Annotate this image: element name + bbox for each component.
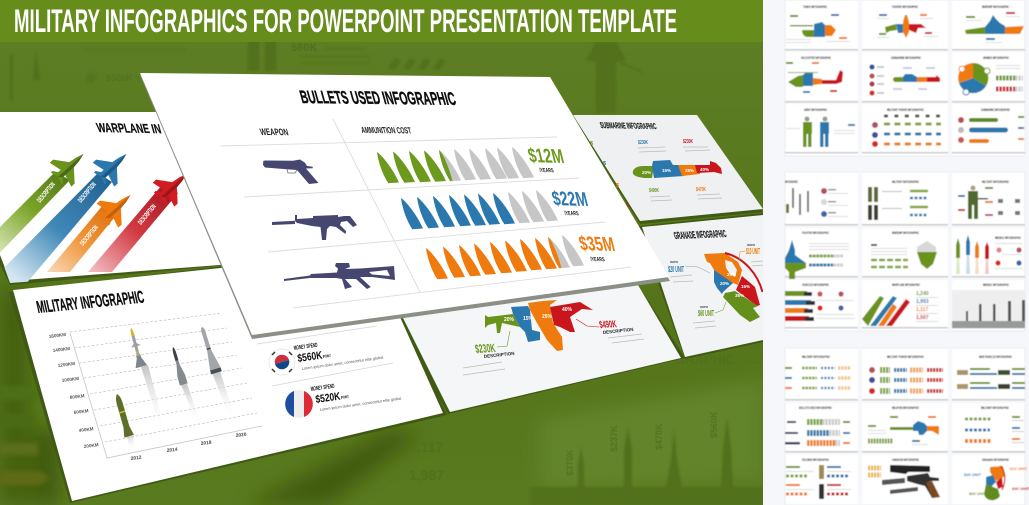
money spend: South Korea: MONEY SPEND xyxy=(293,343,318,352)
column heading: ammunition cost: AMMUNITION COST xyxy=(360,125,413,135)
callout: $230K xyxy=(474,331,515,359)
submarine slide labels: $470K xyxy=(696,187,706,193)
plane percent labels: 25% xyxy=(542,314,553,320)
thumbnail: warplane ribbons: 1,993 xyxy=(916,299,929,305)
thumbnail: warship xyxy=(965,4,1024,43)
thumbnail: helicopter xyxy=(786,55,843,93)
panel: grenade slide: DESCRIPTION xyxy=(747,243,755,247)
money spend: South Korea: /POINT xyxy=(322,353,331,359)
value: $12M xyxy=(526,145,566,174)
icon: assault rifle xyxy=(284,263,395,289)
missile 3 xyxy=(169,346,188,386)
y-axis labels: 1400KM xyxy=(53,346,71,353)
thumbnail: grenade xyxy=(964,457,1029,500)
y-axis labels: 200KM xyxy=(84,442,99,449)
thumbnail: bullets used xyxy=(785,405,850,444)
background: blurred green backdrop: 560K xyxy=(291,42,317,54)
plane percent labels xyxy=(504,307,573,323)
warplane slide heading: WARPLANE IN xyxy=(95,120,163,136)
money spend: France: Lorem ipsum dolor amet, consectetur elite global. xyxy=(319,395,402,412)
icon: submachine gun xyxy=(272,215,357,240)
icon: pistol xyxy=(263,160,318,184)
ribbon labels: DESCRIPTION xyxy=(137,203,158,226)
callout: $490K xyxy=(576,319,634,335)
thumbnail: military bullets xyxy=(965,405,1024,443)
bullets row: green xyxy=(377,147,534,183)
ribbon labels: DESCRIPTION xyxy=(36,181,57,204)
submarine slide labels: $ xyxy=(616,183,619,189)
background: blurred green backdrop xyxy=(0,0,763,505)
ribbon labels: DESCRIPTION xyxy=(79,224,100,247)
grenade diagram: 35% xyxy=(735,293,744,298)
callout: $490K: $490K xyxy=(598,319,618,331)
y-axis labels: 400KM xyxy=(79,426,94,433)
background: blurred green backdrop: $470K xyxy=(654,423,664,450)
missile smoke trails xyxy=(127,365,235,450)
value: $35M xyxy=(577,233,617,263)
thumbnail: warplane ribbons: 1,117 xyxy=(916,307,928,313)
panel: grenade slide: DESCRIPTION xyxy=(700,305,708,309)
plane diagram split into four colours xyxy=(485,300,593,351)
ribbon labels: DESCRIPTION xyxy=(77,181,98,204)
thumbnail: missile chart small xyxy=(785,179,848,217)
title banner xyxy=(0,0,763,42)
thumbnail: war vehicles xyxy=(957,354,1025,389)
money spend: South Korea: $560K xyxy=(297,350,323,365)
thumbnail: tanks xyxy=(786,4,850,43)
thumbnail group 3 backing xyxy=(785,348,1025,505)
y-axis labels: 600KM xyxy=(74,408,89,415)
plane percent labels: 20% xyxy=(504,317,515,323)
thumbnail: fighter jet xyxy=(785,230,849,279)
panel: main bullets used slide xyxy=(140,73,670,339)
thumbnail: army soldiers xyxy=(786,107,855,147)
missile chart xyxy=(49,313,262,462)
thumbnail: missile row xyxy=(956,235,1023,274)
missile 2 xyxy=(125,326,147,368)
thumbnail: fighter: FIGHTER INFOGRAPHIC xyxy=(892,4,918,9)
background: blurred green backdrop: 1,987 xyxy=(409,467,444,483)
value: $12M: $12M xyxy=(526,145,566,168)
grenade diagram: 20% xyxy=(720,281,729,286)
thumbnail group 1 backing xyxy=(785,0,1025,156)
y-axis labels: 1600KM xyxy=(49,332,67,339)
panel: submarine slide xyxy=(572,115,763,224)
thumbnail: military comparison: MILITARY INFOGRAPHIC xyxy=(802,354,830,359)
thumbnail: grenade: $60 UNIT xyxy=(969,491,987,496)
callout: $230K: DESCRIPTION xyxy=(484,351,515,359)
thumbnail: submarine fleets xyxy=(958,107,1024,143)
thumbnail: handgun xyxy=(868,457,940,498)
thumbnail: military soldiers: MILITARY INFOGRAPHIC xyxy=(892,179,919,184)
thumbnail: grenade: $40 UNIT xyxy=(1012,486,1029,491)
y-axis labels: 800KM xyxy=(70,393,85,400)
value: $12M: /YEARS xyxy=(539,167,554,174)
y-axis labels: 1200KM xyxy=(58,361,76,368)
thumbnail: warplane ribbons: WARPLANE INFOGRAPHIC xyxy=(892,282,920,287)
x-axis labels: 2020 xyxy=(236,432,247,439)
missile 1 xyxy=(112,393,134,438)
column heading: weapon: WEAPON xyxy=(259,127,290,138)
military slide heading: MILITARY INFOGRAPHIC xyxy=(35,287,146,317)
thumbnail: vehicles xyxy=(785,282,854,321)
x-axis labels: 2018 xyxy=(201,440,212,447)
thumbnail: warplane ribbons xyxy=(862,282,938,326)
value: $22M xyxy=(550,188,590,217)
thumbnail: fighter xyxy=(877,4,938,38)
submarine slide heading: SUBMARINE INFOGRAPHIC xyxy=(599,120,658,131)
money spend: France: MONEY SPEND xyxy=(310,384,335,393)
grenade slide labels: $60 UNIT xyxy=(698,309,714,318)
thumbnail: military power troops xyxy=(869,354,943,394)
thumbnail: military power troops: MILITARY POWER INFOGRAPHIC xyxy=(887,354,924,359)
x-axis labels: 2012 xyxy=(131,455,142,462)
thumbnail: fighter jet: FIGHTER INFOGRAPHIC xyxy=(802,230,829,235)
submarine slide labels: $230K xyxy=(638,140,648,146)
blurred vehicles on left xyxy=(0,386,50,485)
money spend: France: /POINT xyxy=(340,394,349,400)
panel: military slide xyxy=(9,266,447,503)
grenade slide labels: $20 UNIT xyxy=(668,265,684,274)
thumbnail: military comparison xyxy=(785,354,851,389)
x-axis labels xyxy=(131,432,247,462)
submarine diagram: 40% xyxy=(700,167,709,172)
value: $22M: /YEARS xyxy=(564,210,579,217)
background soldiers and rockets xyxy=(10,55,13,100)
thumbnail: warplane ribbons: 1,240 xyxy=(916,291,929,297)
panel: warplane slide xyxy=(0,112,221,285)
panel: warplane pie slide xyxy=(398,285,685,414)
ribbons xyxy=(0,172,178,285)
value: $35M: /YEARS xyxy=(590,256,605,263)
flag: South Korea xyxy=(269,349,295,375)
thumbnail: submarine flags xyxy=(869,55,940,96)
submarine diagram: 15% xyxy=(662,168,671,173)
thumbnail: warplane ribbons: 1,507 xyxy=(916,315,929,321)
thumbnail: vehicles: VEHICLES INFOGRAPHIC xyxy=(802,282,829,287)
background: blurred green backdrop: 1,117 xyxy=(409,439,443,455)
background: blurred green backdrop: GRAPHIC xyxy=(675,352,736,367)
thumbnail: missile map xyxy=(952,282,1025,328)
flag: France xyxy=(285,390,313,418)
thumbnail: military soldier figure xyxy=(958,179,1020,219)
thumbnail: soldier: SOLDIER INFOGRAPHIC xyxy=(802,457,829,462)
value: $35M: $35M xyxy=(577,233,617,256)
grenade diagram: 15% xyxy=(741,284,750,289)
thumbnail: submarine flags: SUBMARINE INFOGRAPHIC xyxy=(891,55,921,60)
callout: $230K: $230K xyxy=(474,341,497,356)
thumbnail: missile map: MISSILE INFOGRAPHIC xyxy=(983,282,1009,287)
bullets row: orange xyxy=(426,235,584,279)
panel: grenade slide: DESCRIPTION xyxy=(670,260,678,264)
thumbnail group 2 backing xyxy=(785,172,1025,331)
background: blurred green backdrop: $500K xyxy=(106,73,133,83)
grenade diagram xyxy=(704,253,762,322)
text: $10 UNIT xyxy=(746,247,760,256)
submarine slide labels: $ xyxy=(590,141,593,147)
icon: red jet xyxy=(148,162,197,211)
money spend: South Korea: Lorem ipsum dolor amet, consectetur elite global. xyxy=(301,354,384,371)
thumbnail: army soldiers: ARMY INFOGRAPHIC xyxy=(804,107,827,112)
thumbnail: warship side: WARSHIP INFOGRAPHIC xyxy=(892,230,919,235)
submarine diagram xyxy=(633,160,722,178)
y-axis labels: 1000KM xyxy=(62,376,80,383)
ribbon labels xyxy=(36,181,158,247)
thumbnail: helicopter: HELICOPTER INFOGRAPHIC xyxy=(801,55,831,60)
icon: blue jet xyxy=(88,142,137,191)
thumbnail: bullets used: BULLETS USED INFOGRAPHIC xyxy=(799,405,832,410)
grenade slide labels xyxy=(668,247,760,318)
background: blurred green backdrop: $237K xyxy=(609,425,619,452)
thumbnail: armies pie xyxy=(958,55,1023,95)
background: blurred green backdrop: $560K xyxy=(709,411,719,438)
grenade diagram: 25% xyxy=(727,272,736,277)
thumbnail: missile chart small: INFOGRAPHIC xyxy=(785,179,798,184)
thumbnail: military power: MILITARY POWER INFOGRAPHIC xyxy=(887,107,924,112)
value: $22M: $22M xyxy=(550,188,590,211)
thumbnail: armies pie: ARMIES INFOGRAPHIC xyxy=(983,55,1009,60)
callout: $490K: DESCRIPTION xyxy=(603,327,634,335)
money spend: France xyxy=(310,384,402,412)
thumbnail: warship side xyxy=(871,230,937,269)
submarine slide labels xyxy=(590,139,706,209)
plane percent labels: 15% xyxy=(523,316,534,322)
background: blurred green backdrop: $370K xyxy=(565,449,575,476)
missile 4 xyxy=(197,325,222,374)
thumbnail: military soldiers xyxy=(868,179,928,220)
panel: grenade slide: GRANADE INFOGRAPHIC xyxy=(673,229,728,242)
thumbnail: warship: WARSHIP INFOGRAPHIC xyxy=(982,4,1009,9)
thumbnail: military power xyxy=(872,107,941,147)
panel: right thumbnail column xyxy=(763,0,1029,505)
bullets row: blue xyxy=(401,190,558,229)
thumbnail: tanks: TANKS INFOGRAPHIC xyxy=(803,4,827,9)
icon: orange jet xyxy=(92,183,141,232)
thumbnail: military soldier figure: MILITARY INFOGRAPHIC xyxy=(982,179,1009,184)
thumbnail: handgun: HANDGUN INFOGRAPHIC xyxy=(892,457,919,462)
submarine diagram: 20% xyxy=(642,170,651,175)
thumbnail: weapon: WEAPON INFOGRAPHIC xyxy=(892,405,919,410)
submarine diagram: 25% xyxy=(685,168,694,173)
thumbnail: weapon xyxy=(868,405,939,445)
thumbnail: military bullets: MILITARY INFOGRAPHIC xyxy=(981,405,1009,410)
submarine slide labels: $490K xyxy=(649,188,659,194)
submarine slide labels: $ xyxy=(603,161,606,167)
thumbnail: grenade: $20 UNIT xyxy=(964,472,982,477)
panel: grenade slide xyxy=(638,213,763,359)
submarine slide labels: $ xyxy=(626,203,629,209)
main heading: BULLETS USED INFOGRAPHIC xyxy=(297,86,458,109)
x-axis labels: 2014 xyxy=(167,447,178,454)
icon: green jet xyxy=(45,142,94,191)
money spend: France: $520K xyxy=(315,391,341,406)
y-axis labels xyxy=(49,332,99,449)
thumbnail: grenade: $10 UNIT xyxy=(1010,466,1028,471)
money spend: South Korea xyxy=(293,343,384,371)
submarine slide labels: $230K xyxy=(683,139,693,145)
thumbnail: soldier xyxy=(786,457,851,499)
plane percent labels: 40% xyxy=(562,307,573,313)
